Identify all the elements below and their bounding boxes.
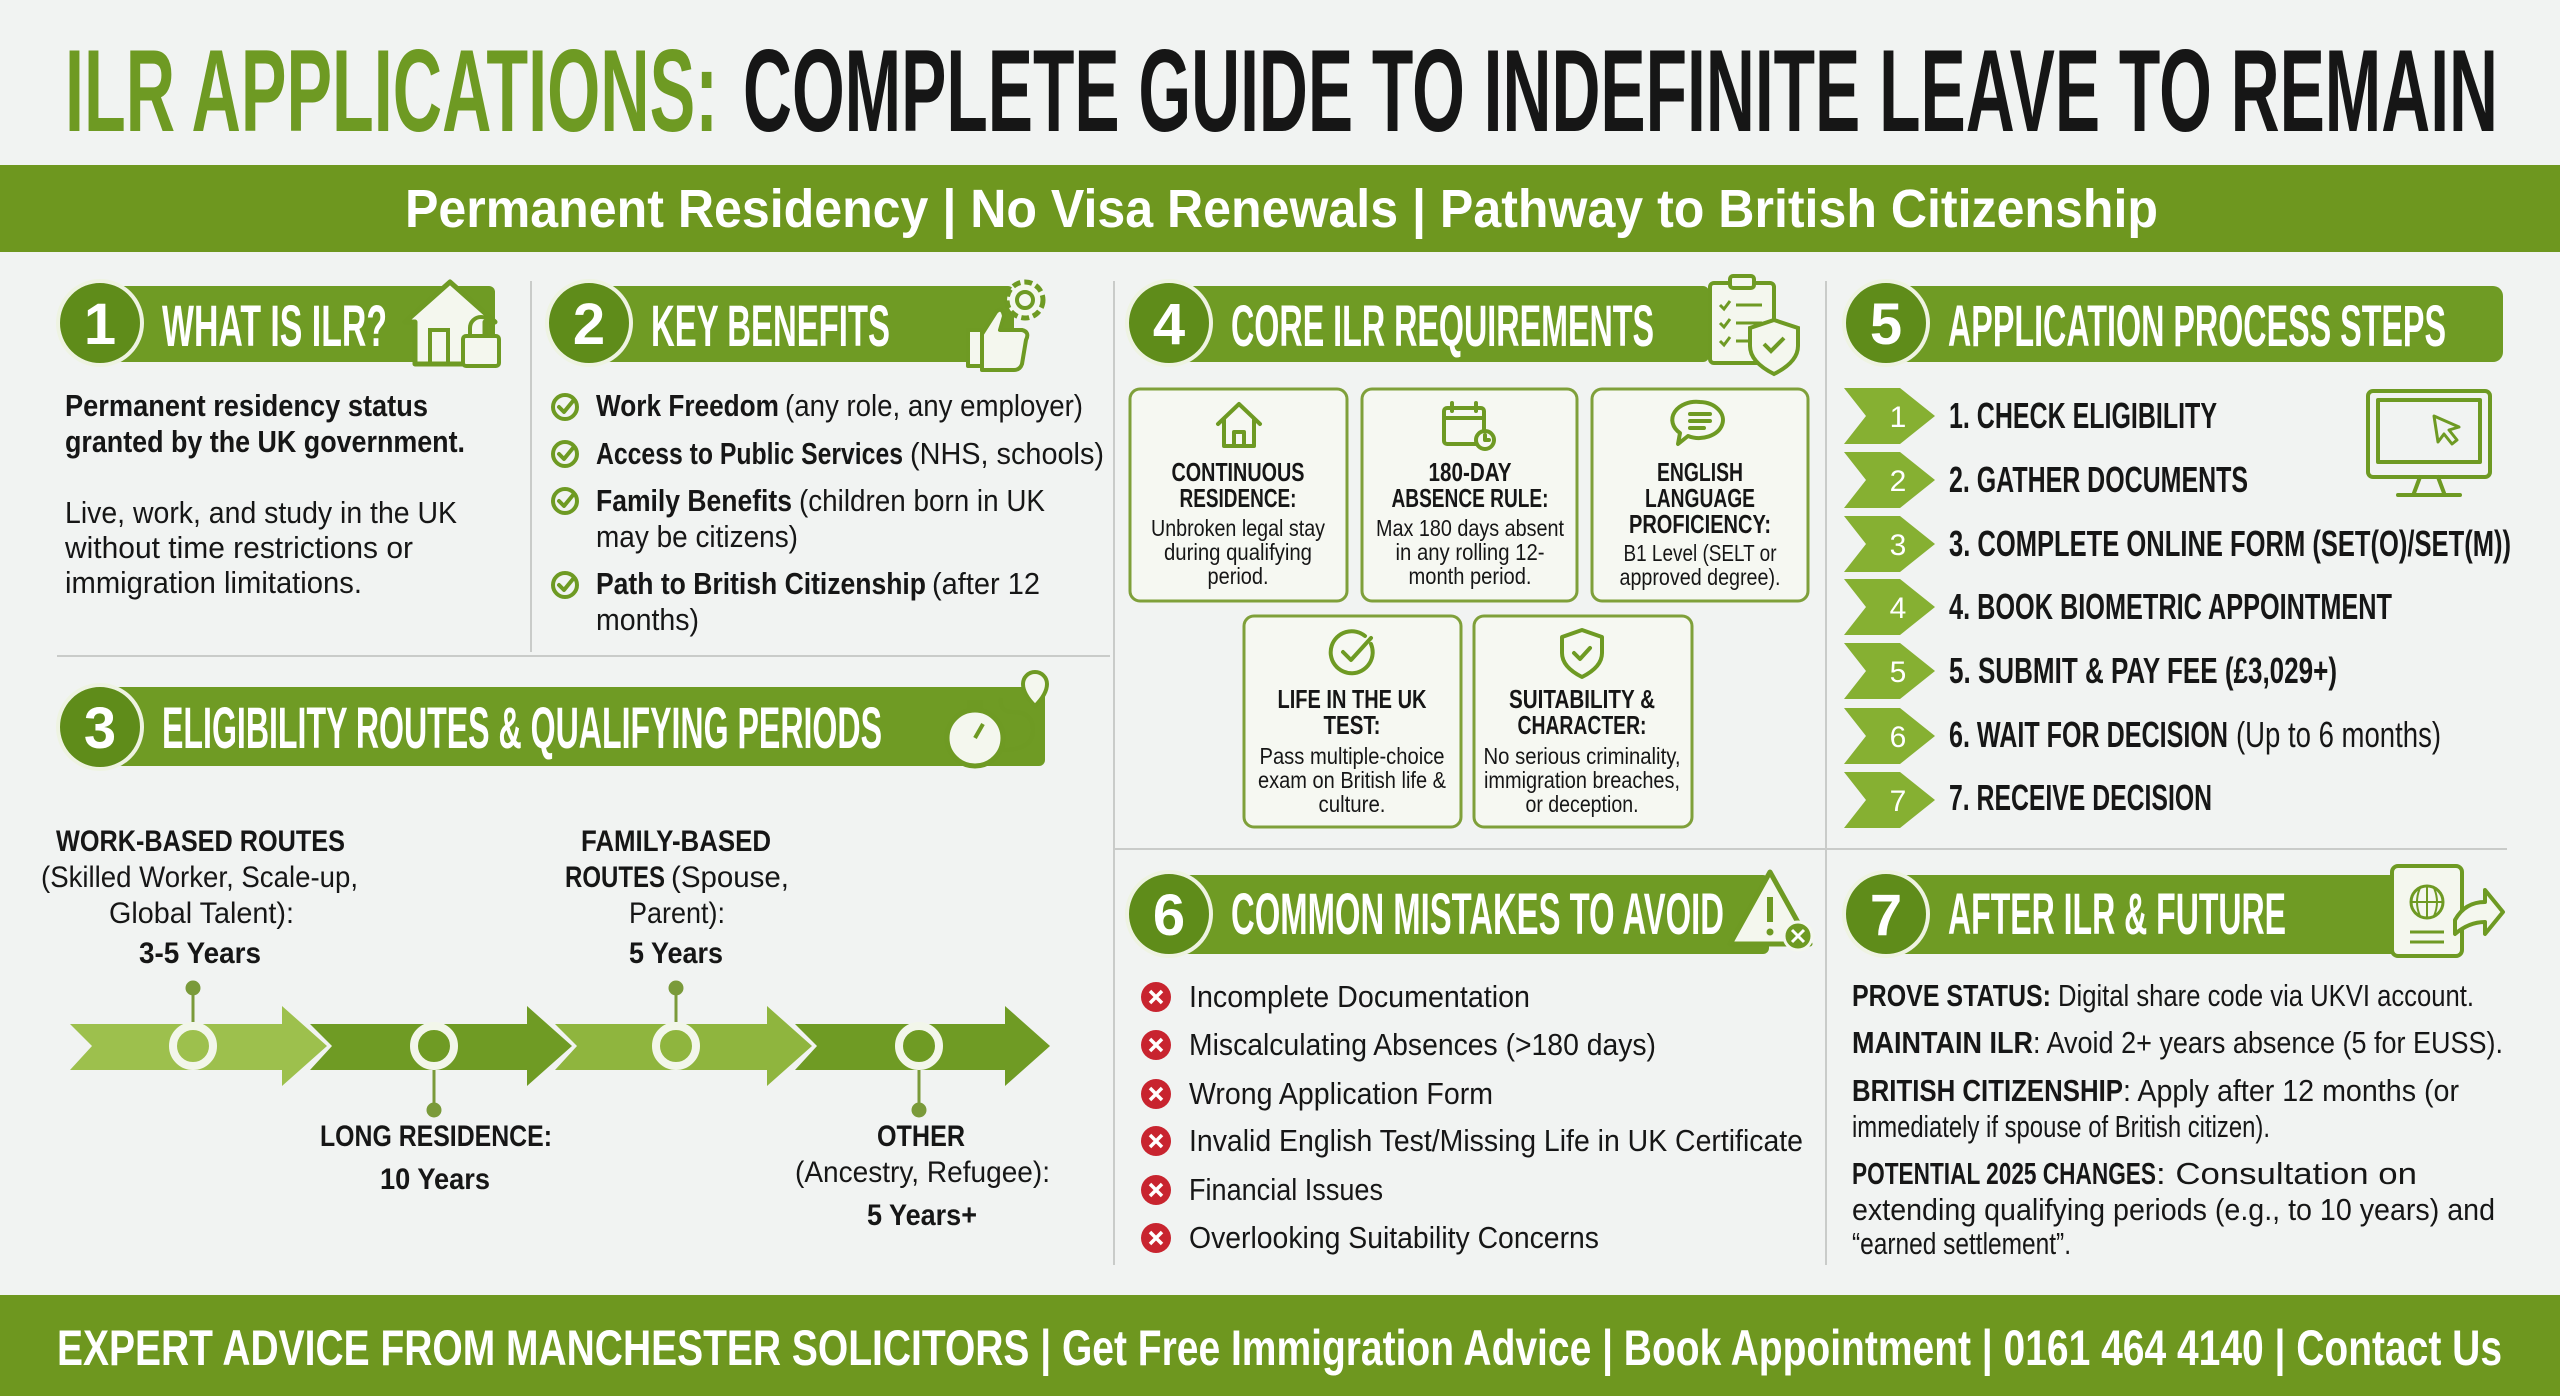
step chevrons: 4 [1890, 592, 1906, 625]
panel 4: core requirements [1127, 276, 1808, 827]
header 4: CORE ILR REQUIREMENTS [1231, 294, 1654, 359]
box: suitability & character: CHARACTER: [1518, 710, 1646, 740]
mistakes list: Wrong Application Form [1189, 1076, 1493, 1111]
benefits list: (any role, any employer) [785, 388, 1083, 423]
mistakes list: Miscalculating Absences (>180 days) [1189, 1027, 1656, 1062]
header 5: 5 [1870, 292, 1902, 357]
label: other: (Ancestry, Refugee): [795, 1156, 1050, 1189]
footer band [0, 1295, 2560, 1396]
box: life in the UK test: LIFE IN THE UK [1278, 684, 1427, 714]
box: life in the UK test: TEST: [1324, 710, 1380, 740]
box: suitability & character [1474, 616, 1692, 827]
label: other: 5 Years+ [867, 1199, 977, 1232]
step chevrons: 6 [1890, 721, 1906, 754]
label: work-based routes: (Skilled Worker, Scale-up, [41, 861, 358, 894]
box: english language [1592, 389, 1808, 601]
box: continuous residence: period. [1208, 563, 1268, 589]
box: 180-day absence rule: in any rolling 12- [1396, 539, 1544, 565]
after ILR text: Digital share code via UKVI account. [2058, 978, 2474, 1013]
after ILR text: immediately if spouse of British citizen). [1852, 1109, 2270, 1144]
box: continuous residence: RESIDENCE: [1180, 483, 1296, 513]
text: definition: immigration limitations. [65, 565, 362, 600]
box: suitability & character: immigration breaches, [1484, 767, 1680, 793]
benefits list: months) [596, 602, 699, 637]
header 7: 7 [1870, 883, 1902, 948]
benefits list: Path to British Citizenship [596, 566, 926, 601]
after ILR text: POTENTIAL 2025 CHANGES [1852, 1156, 2156, 1191]
step chevrons: 5 [1890, 656, 1906, 689]
step chevrons: 1 [1890, 401, 1906, 434]
header 7: AFTER ILR & FUTURE [1948, 882, 2286, 947]
icon: passport [2392, 866, 2503, 956]
mistakes list: Incomplete Documentation [1189, 979, 1530, 1014]
header 1: WHAT IS ILR? [162, 294, 387, 359]
benefits list: may be citizens) [596, 519, 798, 554]
box: 180-day absence rule: Max 180 days absent [1376, 515, 1565, 541]
after ILR text: BRITISH CITIZENSHIP [1852, 1073, 2123, 1108]
header 3: 3 [84, 696, 116, 761]
header 1 [58, 281, 495, 365]
after ILR text: : Consultation on [2156, 1156, 2417, 1191]
header 3 [58, 685, 1045, 769]
box: continuous residence: Unbroken legal stay [1151, 515, 1325, 541]
label: long residence: LONG RESIDENCE: [320, 1120, 552, 1153]
box: english language: LANGUAGE [1645, 483, 1755, 513]
after ILR text: extending qualifying periods (e.g., to 10 years) and [1852, 1192, 2495, 1227]
panel 5: application steps [1844, 281, 2511, 828]
step chevrons: 7 [1890, 785, 1906, 818]
panel 7: after ILR [1844, 866, 2503, 1261]
label: other: OTHER [877, 1120, 965, 1153]
header 7 [1844, 872, 2436, 956]
benefits list [553, 388, 1104, 637]
icon: clipboard with shield [1710, 276, 1798, 374]
text: definition: Live, work, and study in the UK [65, 495, 457, 530]
header 6: COMMON MISTAKES TO AVOID [1231, 882, 1724, 947]
label: work-based routes: 3-5 Years [139, 937, 261, 970]
after ILR text: : Avoid 2+ years absence (5 for EUSS). [2033, 1025, 2503, 1060]
mistakes list: Invalid English Test/Missing Life in UK Certificate [1189, 1123, 1803, 1158]
benefits list: Work Freedom [596, 388, 779, 423]
box: continuous residence [1130, 389, 1347, 601]
step chevrons: 2 [1890, 465, 1906, 498]
text: definition: granted by the UK government. [65, 424, 465, 459]
box: 180-day absence rule: ABSENCE RULE: [1392, 483, 1548, 513]
icon: stopwatch and route [947, 672, 1047, 766]
benefits list: (after 12 [932, 566, 1040, 601]
step list: (Up to 6 months) [2236, 714, 2441, 755]
header 6 [1127, 872, 1769, 956]
benefits list: (NHS, schools) [910, 436, 1104, 471]
header 2: KEY BENEFITS [651, 294, 890, 359]
label: other [795, 1120, 1050, 1232]
box: suitability & character: No serious criminality, [1484, 743, 1680, 769]
box: english language: approved degree). [1620, 564, 1780, 590]
panel 2: key benefits [547, 281, 1104, 637]
timeline arrows [70, 982, 1050, 1116]
step list: 6. WAIT FOR DECISION [1949, 714, 2228, 755]
mistakes list [1141, 979, 1803, 1255]
box: life in the UK test: exam on British life & [1258, 767, 1446, 793]
after ILR text: “earned settlement”. [1852, 1226, 2071, 1261]
box: english language: B1 Level (SELT or [1624, 540, 1777, 566]
label: long residence: 10 Years [380, 1163, 490, 1196]
text: definition: Permanent residency status [65, 388, 428, 423]
mistakes list: Financial Issues [1189, 1172, 1383, 1207]
box: english language: PROFICIENCY: [1629, 509, 1771, 539]
box: life in the UK test: Pass multiple-choice [1260, 743, 1444, 769]
header 6: 6 [1153, 883, 1185, 948]
box: life in the UK test [1244, 616, 1461, 827]
label: family-based routes: Parent): [629, 897, 725, 930]
header 1: 1 [84, 292, 116, 357]
step list: 5. SUBMIT & PAY FEE (£3,029+) [1949, 650, 2337, 691]
benefits list: Family Benefits [596, 483, 792, 518]
panel 1: what is ILR [58, 281, 499, 600]
subtitle band [0, 165, 2560, 252]
header 4 [1127, 281, 1709, 365]
label: work-based routes: WORK-BASED ROUTES [56, 825, 345, 858]
step chevrons [1844, 388, 1935, 828]
mistakes list: Overlooking Suitability Concerns [1189, 1220, 1599, 1255]
step list: 2. GATHER DOCUMENTS [1949, 459, 2248, 500]
box: suitability & character: or deception. [1526, 791, 1638, 817]
header 5 [1844, 281, 2503, 365]
icon: monitor [2368, 391, 2490, 495]
box: continuous residence: during qualifying [1164, 539, 1312, 565]
after ILR text: PROVE STATUS: [1852, 978, 2051, 1013]
header 2 [547, 281, 1014, 365]
label: family-based routes: FAMILY-BASED [581, 825, 771, 858]
after ILR text [1852, 978, 2503, 1261]
label: work-based routes: Global Talent): [109, 897, 294, 930]
text: definition [64, 388, 465, 600]
box: 180-day absence rule: month period. [1408, 563, 1532, 589]
step list [1949, 395, 2511, 818]
header 3: ELIGIBILITY ROUTES & QUALIFYING PERIODS [162, 696, 882, 761]
panel 6: common mistakes [1127, 872, 1812, 1255]
step list: 1. CHECK ELIGIBILITY [1949, 395, 2217, 436]
header 4: 4 [1153, 292, 1185, 357]
benefits list: (children born in UK [799, 483, 1045, 518]
box: continuous residence: CONTINUOUS [1172, 457, 1304, 487]
box: 180-day absence rule [1362, 389, 1577, 601]
text: definition: without time restrictions or [64, 530, 413, 565]
after ILR text: MAINTAIN ILR [1852, 1025, 2033, 1060]
benefits list: Access to Public Services [596, 436, 903, 471]
icon: house with lock [405, 282, 499, 366]
label: long residence [320, 1120, 552, 1196]
box: suitability & character: SUITABILITY & [1509, 684, 1655, 714]
subtitle band: Permanent Residency | No Visa Renewals | Pathway to British Citizenship [405, 179, 2158, 240]
label: family-based routes: ROUTES [565, 861, 665, 894]
label: family-based routes: (Spouse, [671, 861, 789, 894]
icon: thumbs up and gear [968, 282, 1043, 370]
title: ILR APPLICATIONS: [65, 25, 718, 156]
after ILR text: : Apply after 12 months (or [2123, 1073, 2459, 1108]
panel 3: eligibility routes [41, 672, 1050, 1232]
box: 180-day absence rule: 180-DAY [1428, 457, 1512, 487]
box: life in the UK test: culture. [1318, 791, 1386, 817]
label: work-based routes [41, 825, 358, 970]
label: family-based routes: 5 Years [629, 937, 723, 970]
step chevrons: 3 [1890, 529, 1906, 562]
box: english language: ENGLISH [1657, 457, 1743, 487]
icon: warning [1730, 872, 1812, 950]
header 2: 2 [573, 292, 605, 357]
label: family-based routes [565, 825, 789, 970]
step list: 7. RECEIVE DECISION [1949, 777, 2212, 818]
